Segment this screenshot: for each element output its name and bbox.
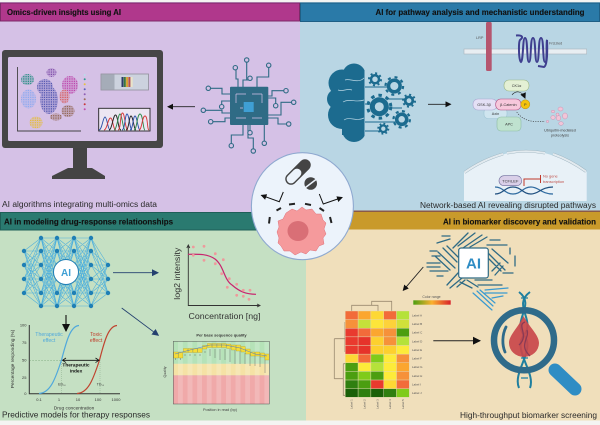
- label: ubiquitin proteolysis: proteolysis: [551, 134, 569, 138]
- heading: pathway: [300, 3, 600, 22]
- central circle: drug and tumor cell: [251, 153, 353, 260]
- label: ubiquitin proteolysis: Ubiquitin-mediated: [544, 128, 576, 132]
- diagram: destruction complex: CK1α: [512, 84, 522, 88]
- chart: therapeutic index: Therapeutic: [35, 332, 63, 338]
- icon: computer monitor: [2, 50, 163, 179]
- diagram: destruction complex: GSK-3β: [477, 103, 492, 107]
- chart: per base sequence quality: Quality: [163, 366, 167, 377]
- heading: omics: [0, 3, 300, 21]
- chart: clustered heatmap: Label 2: [362, 399, 366, 409]
- caption: predictive models: Predictive models for therapy responses: [2, 410, 150, 420]
- arrow: AI to heatmap: [403, 267, 423, 290]
- chart: therapeutic index: 0: [24, 391, 27, 396]
- icon: expression array: [101, 74, 148, 90]
- chart: therapeutic index: 100: [95, 397, 102, 402]
- chart: dose-response intensity: log2 intensity: [172, 247, 182, 300]
- chart: therapeutic index: effect: [43, 338, 56, 344]
- chart: clustered heatmap: Label G: [412, 365, 423, 369]
- chart: therapeutic index: 25: [22, 375, 27, 380]
- diagram: destruction complex: [473, 80, 530, 131]
- chart: therapeutic index: Drug concentration: [54, 406, 95, 412]
- panel: drug-response modeling: [0, 212, 306, 420]
- arrow: brain to pathway: [428, 103, 450, 105]
- panel: omics-driven insights: [0, 2, 300, 212]
- chart: clustered heatmap: Label 3: [375, 399, 379, 409]
- caption: omics: AI algorithms integrating multi-omics data: [2, 200, 158, 209]
- icon: AI circuit brain: [427, 233, 515, 310]
- diagram: destruction complex: APC: [505, 122, 513, 126]
- diagram: destruction complex: Axin: [492, 112, 499, 116]
- diagram: nucleus with repressed transcription: transcription: [543, 179, 564, 184]
- heading: drug-response: AI in modeling drug-response relatioonships: [4, 216, 173, 226]
- diagram: cell membrane receptors: Frizzled: [549, 42, 562, 46]
- icon: AI chip circuit: [201, 58, 296, 153]
- arrow: chip to monitor: [168, 106, 195, 108]
- chart: clustered heatmap: Label D: [412, 339, 423, 343]
- icon: tablet: [304, 177, 317, 190]
- chart: therapeutic index: ED₅₀: [58, 382, 66, 386]
- chart: therapeutic index: 75: [22, 340, 27, 345]
- chart: per base sequence quality: [163, 332, 269, 412]
- chart: therapeutic index: effect: [90, 338, 103, 344]
- diagram: destruction complex: P: [524, 103, 527, 107]
- panel: pathway analysis: [300, 2, 600, 212]
- chart: clustered heatmap: Label 1: [350, 399, 354, 409]
- icon: magnifier with blood drop and DNA: [494, 292, 575, 389]
- arrow: to proteolysis: [517, 112, 545, 122]
- chart: clustered heatmap: Label J: [412, 391, 422, 395]
- chart: clustered heatmap: [334, 301, 423, 409]
- diagram: neural network: AI: [61, 268, 71, 279]
- chart: therapeutic index: 0.1: [36, 397, 43, 402]
- chart: dose-response intensity: [172, 245, 260, 321]
- chart: chromatogram: [99, 108, 150, 131]
- chart: therapeutic index: Toxic: [90, 332, 102, 338]
- caption: biomarker: High-throughput biomarker screening: [460, 411, 597, 420]
- icon: tumor cell: [277, 207, 326, 255]
- panel: biomarker discovery: [300, 212, 600, 420]
- chart: clustered heatmap: Label B: [412, 322, 422, 326]
- chart: per base sequence quality: Position in read (bp): [203, 408, 238, 412]
- chart: therapeutic index: 1: [58, 397, 61, 402]
- caption: pathway: Network-based AI revealing disrupted pathways: [420, 201, 596, 210]
- diagram: nucleus with repressed transcription: TCF/LEF: [502, 178, 519, 184]
- chart: clustered heatmap: Label F: [412, 356, 422, 360]
- diagram: destruction complex: β-Catenin: [500, 103, 517, 107]
- heading: pathway: AI for pathway analysis and mechanistic understanding: [376, 7, 584, 17]
- chart: clustered heatmap: Label E: [412, 348, 422, 352]
- chart: single-cell scatter plot: [18, 67, 86, 131]
- chart: therapeutic index: 50: [22, 358, 27, 362]
- arrow: heatmap to magnifier: [433, 340, 480, 342]
- legend: color range: Color range: [422, 295, 441, 299]
- chart: therapeutic index: 1000: [112, 397, 121, 402]
- chart: clustered heatmap: Label 5: [401, 399, 405, 409]
- chart: therapeutic index: [10, 322, 121, 412]
- chart: therapeutic index: Percentage responding (%): [10, 329, 16, 388]
- dashed arc: [269, 204, 332, 224]
- chart: therapeutic index: TD₅₀: [97, 382, 105, 386]
- arrow: network to dose curve: [113, 272, 158, 274]
- icon: AI circuit brain: AI: [466, 256, 481, 272]
- diagram: nucleus with repressed transcription: No gene: [543, 174, 558, 178]
- chart: therapeutic index: index: [70, 368, 83, 374]
- chart: therapeutic index: 100: [20, 322, 27, 328]
- diagram: cell membrane receptors: LRP: [476, 36, 484, 40]
- legend: color range: [413, 295, 451, 305]
- chart: clustered heatmap: Label I: [412, 382, 421, 386]
- icon: capsule: [291, 165, 305, 179]
- chart: per base sequence quality: Per base sequence quality: [196, 332, 247, 338]
- chart: clustered heatmap: Label H: [412, 374, 422, 378]
- icon: brain with gears: [327, 64, 415, 142]
- chart: therapeutic index: Therapeutic: [62, 364, 90, 368]
- arrow: network to quality plot: [122, 308, 158, 335]
- arrow: network to response curves: [65, 315, 67, 331]
- diagram: nucleus with repressed transcription: [464, 150, 587, 201]
- chart: therapeutic index: 10: [76, 397, 81, 402]
- icon: protein fragments: [546, 107, 568, 125]
- chart: dose-response intensity: Concentration [ng]: [188, 311, 260, 321]
- heading: biomarker: [300, 212, 600, 230]
- chart: clustered heatmap: Label C: [412, 331, 423, 335]
- diagram: neural network: [22, 236, 110, 308]
- arrow: right response: [319, 194, 342, 204]
- chart: clustered heatmap: Label A: [412, 314, 422, 318]
- arrow: left response: [262, 192, 283, 202]
- chart: clustered heatmap: Label 4: [388, 399, 392, 409]
- heading: omics: Omics-driven insights using AI: [7, 7, 121, 17]
- diagram: cell membrane receptors: [464, 22, 587, 71]
- heading: drug-response: [0, 212, 306, 230]
